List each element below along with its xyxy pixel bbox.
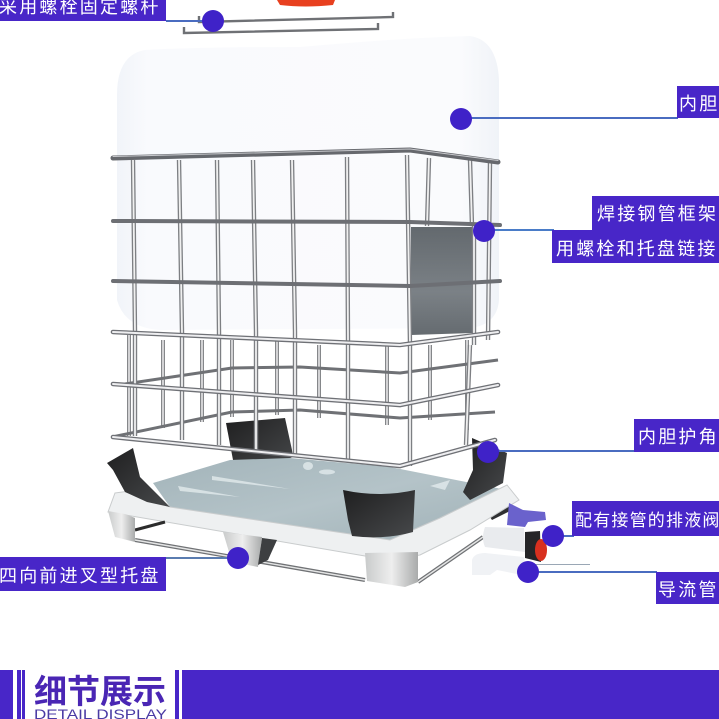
black corner protector: left: [107, 448, 170, 507]
inner tank: [117, 36, 499, 330]
pallet rim: [108, 485, 519, 560]
black corner protector: front: [343, 490, 415, 537]
deck highlights: [178, 462, 450, 497]
callout: drain valve: 配有接管的排液阀: [575, 511, 719, 530]
callout: corner protector: 内胆护角: [638, 427, 719, 447]
callout: outflow pipe: [517, 561, 719, 604]
pallet deck: [153, 458, 507, 545]
callout: outflow pipe: 导流管: [658, 580, 719, 600]
dark underside near valve: [482, 495, 512, 520]
callout: welded frame: [473, 196, 719, 263]
frame vertical bars: [133, 155, 490, 466]
frame horizontal rails: [113, 149, 500, 466]
black corner protector: back: [226, 418, 293, 470]
back lower cage bars: [112, 335, 498, 437]
pallet posts: [108, 511, 418, 587]
callout: four-way pallet: [0, 547, 249, 591]
callout: welded frame: 用螺栓和托盘链接: [556, 239, 718, 259]
footer band: [0, 670, 719, 719]
valve body: [483, 527, 525, 552]
post shadow: [258, 538, 277, 565]
drain valve: [483, 503, 547, 562]
callout: corner protector: [477, 419, 719, 463]
grey side panel: [411, 227, 473, 335]
callout: four-way pallet: 四向前进叉型托盘: [0, 566, 161, 586]
footer heading: 细节展示: [34, 673, 166, 710]
callout: welded frame: 焊接钢管框架: [597, 204, 718, 224]
callout: fixing rods: [0, 0, 224, 32]
red valve cap: [535, 539, 547, 561]
pallet tubes: [135, 522, 483, 582]
red filler cap: [277, 0, 335, 6]
callout: inner tank: [450, 86, 719, 130]
callout: inner tank: 内胆: [679, 94, 719, 114]
black corner protector: right: [463, 438, 507, 500]
outflow elbow: [472, 553, 527, 576]
top rods: [184, 12, 393, 33]
callout: drain valve: [542, 501, 719, 547]
valve nut: [525, 531, 541, 562]
valve handle: [507, 503, 546, 527]
